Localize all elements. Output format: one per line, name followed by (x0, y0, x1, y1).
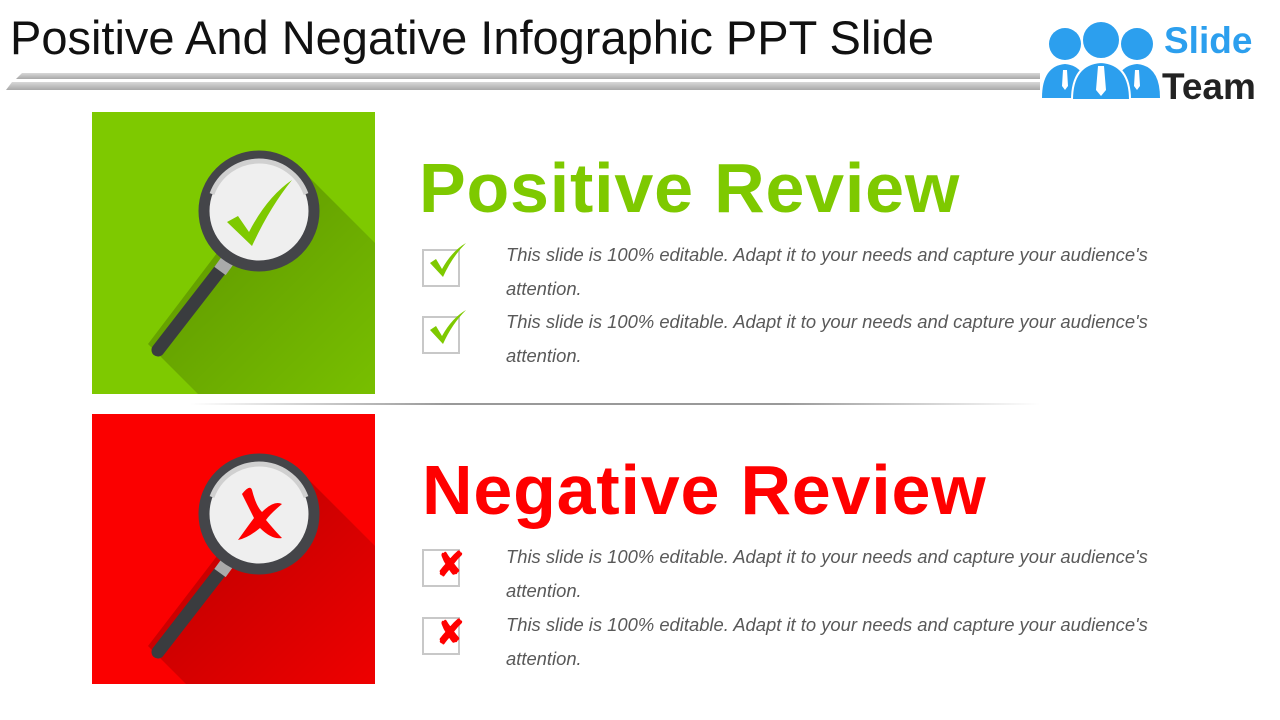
checkbox 2 (422, 316, 460, 354)
logo: Slide (1164, 20, 1252, 61)
heading: positive: Positive Review (419, 149, 960, 227)
xbox 1: ✘ (436, 546, 464, 584)
text 3: This slide is 100% editable. Adapt it to your needs and capture your audience's attention. (506, 546, 1148, 600)
text 4: This slide is 100% editable. Adapt it to your needs and capture your audience's attention. (506, 614, 1148, 668)
icon: people (1042, 22, 1160, 99)
icon: magnifier (158, 156, 314, 350)
xbox 2 (422, 617, 460, 655)
text 2: This slide is 100% editable. Adapt it to your needs and capture your audience's attention. (506, 311, 1148, 366)
text 1: This slide is 100% editable. Adapt it to your needs and capture your audience's attention. (506, 244, 1148, 298)
icon: magnifier with x (158, 459, 314, 652)
xbox 1 (422, 549, 460, 587)
positive bullets (422, 243, 1148, 366)
logo: Team (1162, 66, 1256, 107)
negative bullets (422, 546, 1148, 668)
panel: negative image (92, 414, 375, 684)
xbox 2: ✘ (436, 614, 464, 652)
panel: positive image (92, 112, 375, 394)
checkbox 1 (422, 249, 460, 287)
logo (1042, 20, 1256, 107)
heading: negative: Negative Review (422, 451, 986, 529)
title: Positive And Negative Infographic PPT Slide (10, 11, 934, 64)
